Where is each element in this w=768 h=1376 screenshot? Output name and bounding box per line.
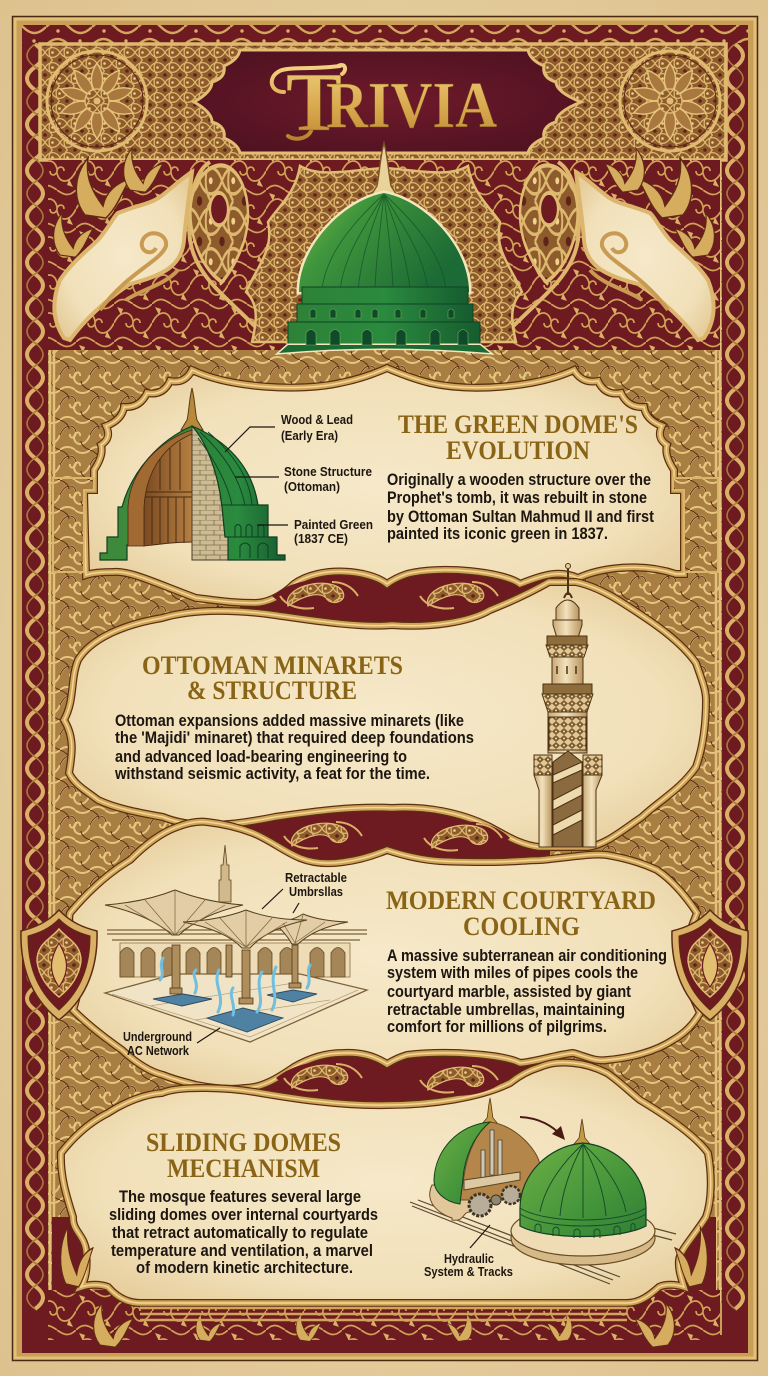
shield right bbox=[672, 910, 748, 1020]
label: hydraulic system: System & Tracks bbox=[424, 1264, 513, 1279]
right cream spandrel bbox=[576, 172, 714, 340]
body text: the 'Majidi' minaret) that required deep foundations bbox=[115, 729, 474, 747]
arch zone behind dome bbox=[48, 148, 720, 350]
body text: Prophet's tomb, it was rebuilt in stone bbox=[387, 489, 647, 507]
left dome shell bbox=[434, 1122, 490, 1204]
right paisley bbox=[520, 165, 578, 283]
minaret illustration bbox=[534, 564, 602, 847]
body text: withstand seismic activity, a feat for the time. bbox=[114, 765, 430, 783]
body text: retractable umbrellas, maintaining bbox=[387, 1001, 625, 1019]
courtyard illustration bbox=[105, 845, 367, 1042]
label: underground AC network: Underground bbox=[123, 1029, 192, 1044]
leader line bbox=[470, 1225, 490, 1248]
cool air wisps bbox=[160, 958, 310, 1015]
dome base flange bbox=[279, 345, 490, 353]
header ornament band bbox=[40, 44, 726, 160]
body text: sliding domes over internal courtyards bbox=[109, 1206, 378, 1224]
heading: MODERN COURTYARD bbox=[386, 886, 656, 915]
column capital left bbox=[53, 478, 94, 572]
minaret spiral stair base bbox=[553, 751, 582, 847]
label: stone structure: Stone Structure bbox=[284, 464, 372, 479]
dome upper drum bbox=[302, 287, 468, 305]
panel 3 background bbox=[69, 822, 700, 1089]
column capital right bbox=[673, 478, 718, 572]
title text: RIVIA bbox=[326, 69, 497, 142]
dome finial bbox=[370, 143, 398, 197]
maroon backgrounds behind panel dividers and bottom border bbox=[48, 560, 720, 1340]
heading: MECHANISM bbox=[167, 1154, 320, 1183]
piston platform bbox=[464, 1172, 520, 1190]
minaret finial bbox=[564, 569, 572, 598]
label: underground AC network: AC Network bbox=[127, 1043, 190, 1058]
left dome base bbox=[430, 1185, 470, 1220]
body text: painted its iconic green in 1837. bbox=[387, 525, 608, 543]
panel: green dome evolution bbox=[53, 368, 718, 603]
dome 1 finial bbox=[181, 388, 203, 430]
swash on title T bbox=[272, 65, 345, 139]
body text: system with miles of pipes cools the bbox=[387, 964, 638, 982]
motion arrow bbox=[520, 1117, 561, 1135]
left dome finial bbox=[482, 1098, 498, 1124]
body text: temperature and ventilation, a marvel bbox=[111, 1242, 373, 1260]
title text: T bbox=[286, 56, 342, 149]
dome windows bbox=[306, 309, 468, 345]
floor bbox=[105, 974, 367, 1042]
panel: sliding domes bbox=[61, 1061, 711, 1303]
dome lower drum bbox=[288, 322, 480, 347]
rails bbox=[410, 1200, 676, 1284]
heading: COOLING bbox=[463, 912, 580, 941]
background minaret bbox=[219, 845, 231, 902]
label: hydraulic system: Hydraulic bbox=[444, 1251, 494, 1266]
label: painted green: Painted Green bbox=[294, 517, 373, 532]
right dome ribs and windows bbox=[520, 1144, 646, 1238]
shield left bbox=[21, 910, 97, 1020]
hero green dome bbox=[279, 143, 490, 353]
umbrella columns bbox=[170, 945, 301, 1004]
gears bbox=[469, 1194, 491, 1216]
body text: A massive subterranean air conditioning bbox=[387, 947, 667, 965]
panel 4 background bbox=[61, 1062, 711, 1303]
body text: courtyard marble, assisted by giant bbox=[387, 983, 631, 1001]
lotus petals behind dome bbox=[246, 166, 522, 342]
minaret side towers bbox=[534, 755, 552, 847]
body text: The mosque features several large bbox=[119, 1188, 361, 1206]
right medallion bbox=[620, 51, 720, 151]
lens ornament right middle bbox=[416, 821, 510, 854]
pistons bbox=[481, 1130, 502, 1178]
body text: and advanced load-bearing engineering to bbox=[115, 748, 407, 766]
arcade arches bbox=[120, 948, 345, 977]
heading: OTTOMAN MINARETS bbox=[142, 651, 403, 680]
leader lines bbox=[225, 427, 288, 525]
dome 1 wooden interior bbox=[144, 432, 192, 546]
label: wood and lead: Wood & Lead bbox=[281, 412, 353, 427]
title plaque bbox=[194, 50, 581, 153]
arcade wall bbox=[120, 943, 350, 977]
label: retractable umbrellas: Umbrsllas bbox=[289, 884, 343, 899]
label: wood and lead: (Early Era) bbox=[281, 428, 338, 443]
lens ornament left bottom bbox=[276, 1061, 370, 1094]
right floral corner bbox=[605, 148, 714, 257]
body text: Ottoman expansions added massive minarets (like bbox=[115, 712, 464, 730]
dome 1 green right shell bbox=[192, 426, 285, 560]
dome ribs bbox=[322, 194, 446, 290]
lens ornament left middle bbox=[276, 819, 370, 852]
label: stone structure: (Ottoman) bbox=[284, 479, 340, 494]
left paisley bbox=[190, 165, 248, 283]
arcade rails bbox=[107, 930, 367, 940]
leader lines bbox=[197, 889, 299, 1043]
cut-away dome diagram bbox=[100, 388, 285, 560]
left dome open interior bbox=[460, 1122, 540, 1200]
right dome finial bbox=[574, 1119, 590, 1144]
body text: comfort for millions of pilgrims. bbox=[387, 1018, 607, 1036]
sliding domes illustration bbox=[410, 1098, 676, 1284]
heading: & STRUCTURE bbox=[187, 676, 357, 705]
left cream spandrel bbox=[54, 172, 192, 340]
minaret shaft bbox=[548, 712, 587, 753]
heading: SLIDING DOMES bbox=[146, 1128, 341, 1157]
label: painted green: (1837 CE) bbox=[294, 531, 348, 546]
left floral corner bbox=[54, 148, 163, 257]
panel 1 background bbox=[84, 368, 684, 603]
right dome cupola bbox=[520, 1143, 646, 1236]
dome 1 green left shell bbox=[100, 426, 192, 560]
lens ornament right top bbox=[412, 579, 506, 612]
panel 2 background bbox=[64, 582, 706, 847]
panel: ottoman minarets bbox=[64, 579, 706, 847]
minaret cap bbox=[556, 600, 579, 620]
heading: THE GREEN DOME'S bbox=[398, 410, 638, 439]
body text: that retract automatically to regulate bbox=[112, 1224, 368, 1242]
left medallion bbox=[47, 51, 147, 151]
body text: of modern kinetic architecture. bbox=[136, 1259, 353, 1277]
heading: EVOLUTION bbox=[446, 436, 590, 465]
dome cupola bbox=[299, 193, 469, 292]
dome 1 stone core bbox=[192, 426, 228, 560]
body text: by Ottoman Sultan Mahmud II and first bbox=[387, 508, 654, 526]
dome middle drum bbox=[297, 304, 473, 323]
arch gold outline bbox=[189, 162, 579, 342]
AC grids bbox=[153, 990, 317, 1032]
bottom rails bbox=[140, 1308, 627, 1320]
right spiral scroll bbox=[590, 233, 668, 310]
lens ornament right bottom bbox=[412, 1063, 506, 1096]
umbrella canopies bbox=[105, 890, 348, 948]
canopy ribs bbox=[125, 890, 325, 947]
right dome base bbox=[511, 1211, 655, 1265]
lens ornament left top bbox=[272, 579, 366, 612]
panel: modern courtyard cooling bbox=[69, 819, 700, 1089]
label: retractable umbrellas: Retractable bbox=[285, 870, 347, 885]
left spiral scroll bbox=[100, 233, 178, 310]
bottom corner flourishes bbox=[61, 1227, 707, 1347]
body text: Originally a wooden structure over the bbox=[387, 471, 651, 489]
